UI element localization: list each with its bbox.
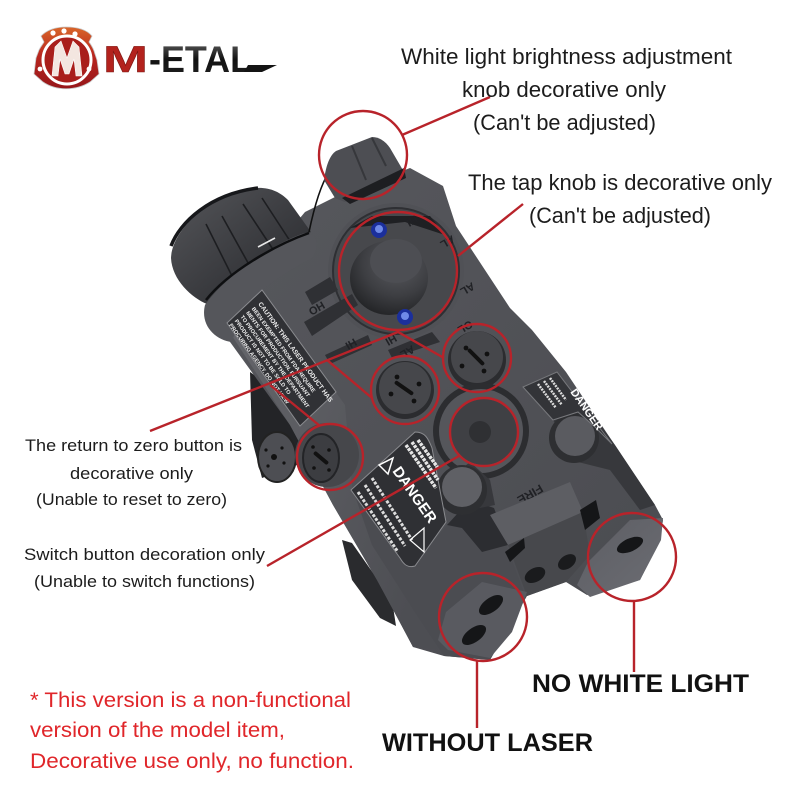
engraved labels: AL	[458, 279, 476, 297]
collar glint	[258, 238, 275, 247]
flashlight collar	[204, 233, 317, 342]
callout: return to zero button: The return to zero button is	[25, 436, 242, 455]
disclaimer note: Decorative use only, no function.	[30, 750, 354, 773]
callout: brightness knob: White light brightness adjustment	[401, 44, 732, 69]
engraved labels: HO	[306, 298, 326, 317]
side button on body	[295, 423, 359, 487]
logo: M-ETAL	[34, 27, 277, 89]
disclaimer note: * This version is a non-functional	[30, 689, 351, 712]
callout: brightness knob	[401, 44, 732, 135]
logo: M-ETAL: -ETAL	[149, 39, 252, 80]
engraved labels: OL	[455, 317, 474, 336]
disclaimer note	[30, 689, 354, 773]
left end cap	[438, 582, 527, 658]
caution label: TO PROCUREMENT BY THE DEPARTMENT	[239, 315, 310, 410]
engraved labels: AL	[398, 342, 416, 360]
callout: switch button: (Unable to switch functions)	[34, 572, 255, 591]
fire switch button	[433, 383, 529, 479]
engraved slots	[304, 277, 440, 364]
wire loop	[309, 172, 329, 232]
engraved labels: HI	[343, 335, 358, 351]
device: laser unit	[171, 137, 663, 660]
engraved labels: FIRE	[515, 481, 546, 507]
caution label: MENTS FOR PRODUCTION. PURSUANT	[244, 310, 311, 399]
top plate and hardware	[490, 482, 600, 596]
caution label	[227, 290, 336, 426]
selector buttons	[376, 331, 506, 419]
right end cap	[577, 518, 663, 597]
caution label: PROCURING AGENCY. DO NOT VIEW	[227, 323, 290, 406]
callout: return to zero button	[25, 436, 242, 509]
disclaimer note: version of the model item,	[30, 719, 285, 742]
callout: switch button	[24, 545, 266, 591]
side face	[225, 290, 445, 650]
callout: brightness knob: knob decorative only	[462, 77, 666, 102]
danger label front	[351, 432, 446, 567]
knurl grooves	[206, 198, 292, 282]
callout: return to zero button: (Unable to reset to zero)	[36, 490, 227, 509]
danger label rear	[523, 372, 612, 444]
caution label: PRODUCT IS NOT TO BE SOLD TO	[233, 319, 292, 397]
logo: M-ETAL: M	[103, 39, 148, 80]
engraved labels: HI	[383, 331, 398, 347]
callout: tap knob: (Can't be adjusted)	[529, 203, 711, 228]
lower corner shading	[352, 487, 525, 660]
engraved labels	[306, 212, 546, 507]
engraved labels: HI	[404, 212, 419, 228]
callout: return to zero button: decorative only	[70, 464, 194, 483]
round buttons	[437, 410, 655, 515]
flashlight head knurled ring	[171, 188, 311, 304]
callout: tap knob: The tap knob is decorative only	[468, 170, 772, 195]
danger label front: DANGER	[389, 464, 440, 527]
tap knob dial plate	[328, 203, 464, 339]
callout: brightness knob: (Can't be adjusted)	[473, 110, 656, 135]
main body	[215, 168, 663, 660]
lens rim	[171, 188, 258, 246]
label: without laser: WITHOUT LASER	[382, 729, 593, 757]
engraved labels: AL	[438, 232, 457, 250]
label: no white light: NO WHITE LIGHT	[532, 670, 749, 698]
callout: switch button: Switch button decoration only	[24, 545, 266, 564]
danger label rear: DANGER	[568, 387, 605, 433]
caution label: CAUTION: THIS LASER PRODUCT HAS	[256, 301, 334, 404]
top brightness knob	[324, 137, 406, 204]
side mount and left button	[250, 372, 396, 626]
caution label: BEEN EXEMPTED FROM FDA REQUIRE	[250, 306, 316, 394]
callout: tap knob	[468, 170, 772, 228]
red callout circles and leader lines	[150, 97, 676, 728]
